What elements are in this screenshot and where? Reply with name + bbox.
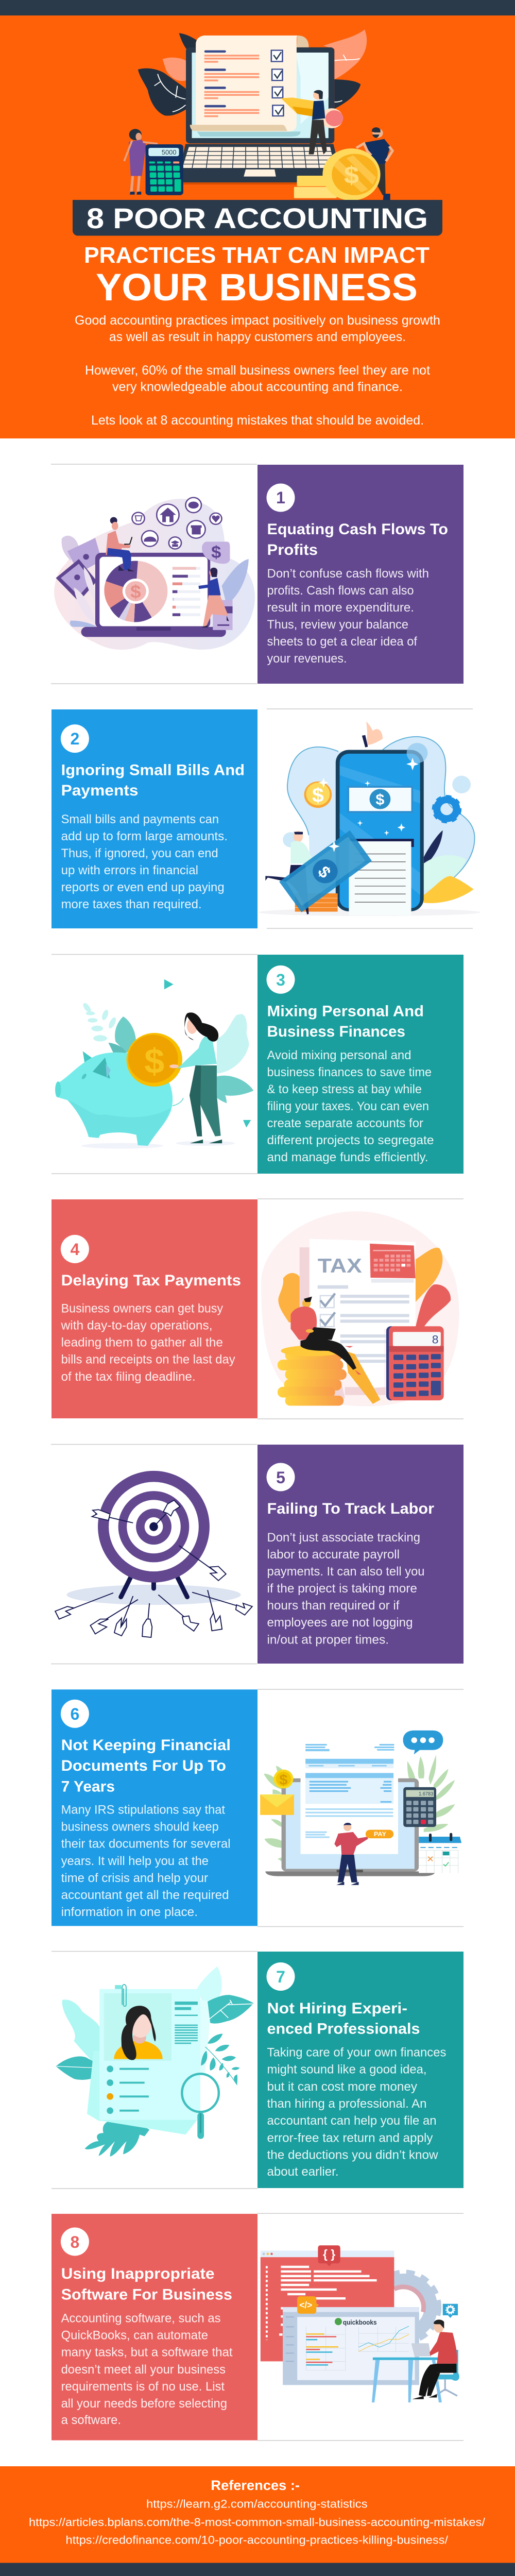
illustration 2: phone with bill <box>259 721 480 916</box>
panel: mistake 5 <box>51 1445 464 1664</box>
body text 8 <box>61 2311 233 2427</box>
heading 2: Ignoring Small Bills And <box>61 762 245 779</box>
body text 6: accountant get all the required <box>61 1888 229 1902</box>
body text 5 <box>267 1531 424 1647</box>
illustration 8: code windows and QuickBooks: { } <box>323 2247 335 2261</box>
body text 1: profits. Cash flows can also <box>267 584 414 598</box>
body text 6: business owners should keep <box>61 1820 219 1834</box>
body text 1: your revenues. <box>267 652 347 666</box>
illustration 1: finance dashboard laptop: $ <box>130 581 141 602</box>
badge 3: 3 <box>276 971 285 989</box>
body text 2 <box>61 812 228 911</box>
heading 7: enced Professionals <box>267 2020 420 2037</box>
hero illustration: laptop with checklist <box>124 29 392 200</box>
illustration 5: target with arrows <box>55 1471 252 1637</box>
illustration 6: invoice on laptop: PAY <box>374 1831 387 1838</box>
illustration 6: invoice on laptop <box>260 1731 461 1885</box>
hero illustration: laptop with checklist: 5000 <box>162 148 177 156</box>
illustration 3: piggy bank and woman <box>55 979 253 1149</box>
reference links: https://articles.bplans.com/the-8-most-common-small-business-accounting-mistakes/ <box>29 2516 486 2529</box>
body text 5: in/out at proper times. <box>267 1633 389 1647</box>
body text 7: might sound like a good idea, <box>267 2063 426 2077</box>
references heading: References :- <box>211 2478 300 2493</box>
badge 5: 5 <box>276 1468 285 1487</box>
heading 6: 7 Years <box>61 1778 115 1795</box>
illustration 6: invoice on laptop: 1.6783 <box>419 1791 434 1797</box>
panel: mistake 4 <box>52 1199 464 1419</box>
illustration 7: resume with magnifier <box>56 1967 253 2157</box>
badge 6 <box>61 1700 89 1728</box>
body text 8: QuickBooks, can automate <box>61 2329 208 2343</box>
body text 4: with day-to-day operations, <box>61 1319 213 1333</box>
panel: mistake 8 <box>52 2213 464 2441</box>
title: line three: YOUR BUSINESS <box>96 266 418 309</box>
body text 8: a software. <box>61 2413 121 2427</box>
intro text: Lets look at 8 accounting mistakes that should be avoided. <box>91 413 424 428</box>
references and footer bands <box>0 2466 515 2576</box>
illustration 2: phone with bill: $ <box>314 862 335 882</box>
body text 7: accountant can help you file an <box>267 2114 437 2128</box>
top dark bar <box>0 0 515 15</box>
body text 6: years. It will help you at the <box>61 1854 209 1868</box>
body text 8: Accounting software, such as <box>61 2311 221 2325</box>
badge 2: 2 <box>71 730 79 748</box>
body text 5: hours than required or if <box>267 1599 400 1613</box>
badge 7: 7 <box>276 1968 285 1986</box>
reference links: https://credofinance.com/10-poor-accounting-practices-killing-business/ <box>66 2534 449 2547</box>
body text 5: employees are not logging <box>267 1616 413 1630</box>
heading 6 <box>61 1737 231 1795</box>
badge 4 <box>61 1235 89 1263</box>
panel: mistake 2 <box>52 709 480 928</box>
body text 2: up with errors in financial <box>61 863 198 877</box>
illustration 4: tax form, coins, calculator: TAX <box>318 1255 362 1277</box>
heading 2 <box>61 762 245 799</box>
badge 8: 8 <box>71 2233 79 2251</box>
intro text: very knowledgeable about accounting and finance. <box>112 380 403 394</box>
badge 7 <box>267 1962 295 1991</box>
body text 7 <box>267 2045 446 2179</box>
body text 2: Thus, if ignored, you can end <box>61 846 218 860</box>
body text 2: reports or even end up paying <box>61 880 225 894</box>
illustration 4: tax form, coins, calculator <box>261 1211 459 1406</box>
body text 4: leading them to gather all the <box>61 1336 223 1350</box>
badge 4: 4 <box>71 1240 80 1259</box>
illustration 2: phone with bill: $ <box>375 792 385 808</box>
illustration 1: finance dashboard laptop: $ <box>211 543 221 562</box>
intro text: However, 60% of the small business owners feel they are not <box>85 363 430 378</box>
body text 6: information in one place. <box>61 1905 198 1919</box>
panel: mistake 1 <box>51 464 464 684</box>
heading 8: Software For Business <box>61 2286 232 2303</box>
body text 6: Many IRS stipulations say that <box>61 1803 225 1817</box>
heading 3 <box>267 1003 424 1040</box>
reference links: https://learn.g2.com/accounting-statistics <box>146 2498 368 2511</box>
badge 1 <box>267 483 295 512</box>
heading 7: Not Hiring Experi- <box>267 2000 407 2017</box>
heading 8 <box>61 2265 232 2303</box>
body text 7: the deductions you didn’t know <box>267 2148 438 2162</box>
body text 3: Avoid mixing personal and <box>267 1048 411 1062</box>
heading 3: Mixing Personal And <box>267 1003 424 1020</box>
heading 5: Failing To Track Labor <box>267 1500 434 1517</box>
badge 5 <box>267 1463 295 1491</box>
illustration 4: tax form, coins, calculator: 8 <box>432 1333 438 1346</box>
body text 8: requirements is of no use. List <box>61 2380 225 2394</box>
hero illustration: laptop with checklist: $ <box>344 161 359 189</box>
illustration 3: piggy bank and woman: $ <box>144 1042 164 1081</box>
badge 2 <box>61 724 89 753</box>
body text 2: add up to form large amounts. <box>61 829 228 843</box>
references band <box>0 2466 515 2563</box>
body text 3 <box>267 1048 434 1164</box>
body text 3: business finances to save time <box>267 1065 432 1079</box>
heading 8: Using Inappropriate <box>61 2265 215 2282</box>
body text 7: but it can cost more money <box>267 2080 417 2094</box>
body text 1: sheets to get a clear idea of <box>267 635 417 649</box>
heading 3: Business Finances <box>267 1023 405 1040</box>
illustration 1: finance dashboard laptop <box>54 498 255 650</box>
heading 7 <box>267 2000 420 2037</box>
body text 4: bills and receipts on the last day <box>61 1353 235 1367</box>
body text 6 <box>61 1803 231 1919</box>
body text 7: Taking care of your own finances <box>267 2045 446 2060</box>
heading 2: Payments <box>61 782 139 799</box>
body text 2: Small bills and payments can <box>61 812 219 826</box>
body text 6: time of crisis and help your <box>61 1871 208 1885</box>
body text 3: filing your taxes. You can even <box>267 1099 429 1113</box>
reference links <box>29 2498 486 2547</box>
body text 4: Business owners can get busy <box>61 1301 223 1316</box>
heading 1: Equating Cash Flows To <box>267 521 448 538</box>
body text 5: if the project is taking more <box>267 1582 417 1596</box>
illustration 8: code windows and QuickBooks: </> <box>299 2300 312 2310</box>
badge 3 <box>267 965 295 994</box>
panel: orange header <box>0 15 515 438</box>
body text 1 <box>267 567 429 666</box>
heading 4: Delaying Tax Payments <box>61 1272 241 1289</box>
panel: mistake 6 <box>52 1689 464 1927</box>
illustration 8: code windows and QuickBooks <box>261 2245 459 2402</box>
body text 3: and manage funds efficiently. <box>267 1150 428 1164</box>
badge 1: 1 <box>276 488 285 507</box>
body text 5: payments. It can also tell you <box>267 1565 424 1579</box>
heading 6: Not Keeping Financial <box>61 1737 231 1754</box>
heading 1 <box>267 521 448 558</box>
illustration 2: phone with bill: $ <box>312 784 324 806</box>
illustration 8: code windows and QuickBooks: quickbooks <box>343 2318 377 2326</box>
body text 4 <box>61 1301 235 1384</box>
body text 8: doesn’t meet all your business <box>61 2363 226 2377</box>
title banner: 8 POOR ACCOUNTING <box>87 202 428 234</box>
body text 7: than hiring a professional. An <box>267 2097 426 2111</box>
body text 8: many tasks, but a software that <box>61 2346 233 2360</box>
body text 1: Don’t confuse cash flows with <box>267 567 429 581</box>
footer band <box>0 2563 515 2576</box>
intro text: Good accounting practices impact positively on business growth <box>75 313 440 328</box>
body text 7: error-free tax return and apply <box>267 2131 433 2145</box>
heading 6: Documents For Up To <box>61 1757 226 1774</box>
body text 4: of the tax filing deadline. <box>61 1370 196 1384</box>
body text 3: & to keep stress at bay while <box>267 1082 422 1096</box>
body text 7: about earlier. <box>267 2165 339 2179</box>
body text 5: labor to accurate payroll <box>267 1548 400 1562</box>
illustration 6: invoice on laptop: $ <box>279 1772 288 1788</box>
intro text <box>75 313 440 428</box>
body text 1: Thus, review your balance <box>267 618 408 632</box>
body text 6: their tax documents for several <box>61 1837 231 1851</box>
body text 8: all your needs before selecting <box>61 2397 227 2411</box>
body text 1: result in more expenditure. <box>267 601 414 615</box>
badge 8 <box>61 2228 89 2256</box>
panel: mistake 3 <box>52 954 464 1174</box>
body text 2: more taxes than required. <box>61 897 202 911</box>
heading 1: Profits <box>267 541 318 558</box>
title: line two: PRACTICES THAT CAN IMPACT <box>84 243 430 268</box>
body text 5: Don’t just associate tracking <box>267 1531 420 1545</box>
panel: mistake 7 <box>52 1952 464 2189</box>
intro text: as well as result in happy customers and employees. <box>109 330 406 344</box>
body text 3: create separate accounts for <box>267 1116 423 1130</box>
badge 6: 6 <box>71 1705 79 1723</box>
body text 3: different projects to segregate <box>267 1133 434 1147</box>
